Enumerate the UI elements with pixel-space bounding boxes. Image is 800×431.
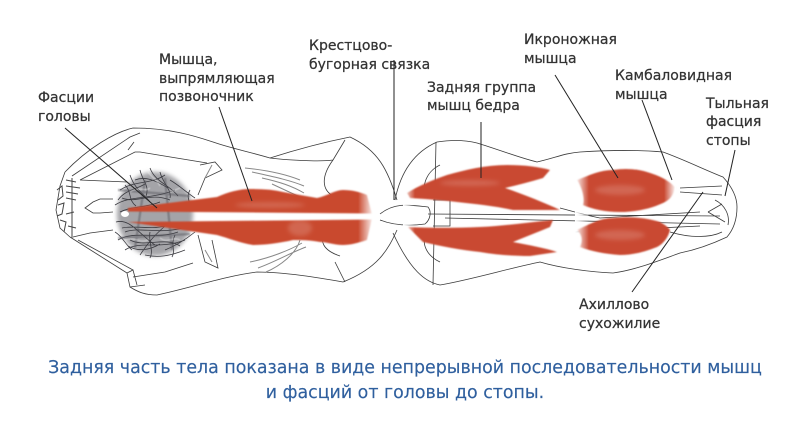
label: soleus: Камбаловидная: [615, 68, 732, 84]
hand: [57, 178, 80, 238]
label: dorsal foot fascia: стопы: [706, 133, 751, 149]
label: erector spinae: позвоночник: [159, 89, 254, 105]
spine: [121, 211, 380, 217]
label: hamstrings: мышц бедра: [427, 98, 520, 114]
ribs and scapula: [205, 165, 306, 272]
body outline: lower body: [380, 141, 737, 285]
muscle: hamstrings: [407, 165, 560, 256]
body outline: upper body and arms: [56, 128, 397, 295]
label: dorsal foot fascia: Тыльная: [706, 96, 769, 112]
label: head fasciae: головы: [38, 109, 91, 125]
label: sacrotuberous ligament: бугорная связка: [309, 57, 430, 73]
leader lines: [65, 60, 735, 292]
label: gastrocnemius: мышца: [524, 51, 577, 67]
muscle: calves: [577, 169, 675, 255]
caption: Задняя часть тела показана в виде непрерывной последовательности мышц: [48, 358, 762, 378]
muscle: erector spinae: [128, 189, 372, 245]
muscle end fades: [358, 165, 676, 258]
label: soleus: мышца: [615, 87, 668, 103]
label: hamstrings: Задняя группа: [427, 80, 536, 96]
label: erector spinae: выпрямляющая: [159, 71, 275, 87]
label: gastrocnemius: Икроножная: [524, 32, 617, 48]
label: erector spinae: Мышца,: [159, 52, 218, 68]
hair: [115, 168, 195, 258]
muscle highlights: [235, 180, 645, 240]
label: Achilles tendon: Ахиллово: [579, 297, 649, 313]
label: dorsal foot fascia: фасция: [706, 114, 761, 130]
caption: и фасций от головы до стопы.: [266, 383, 544, 403]
label: head fasciae: Фасции: [38, 90, 94, 106]
label: Achilles tendon: сухожилие: [579, 316, 660, 332]
label: sacrotuberous ligament: Крестцово-: [309, 38, 392, 54]
